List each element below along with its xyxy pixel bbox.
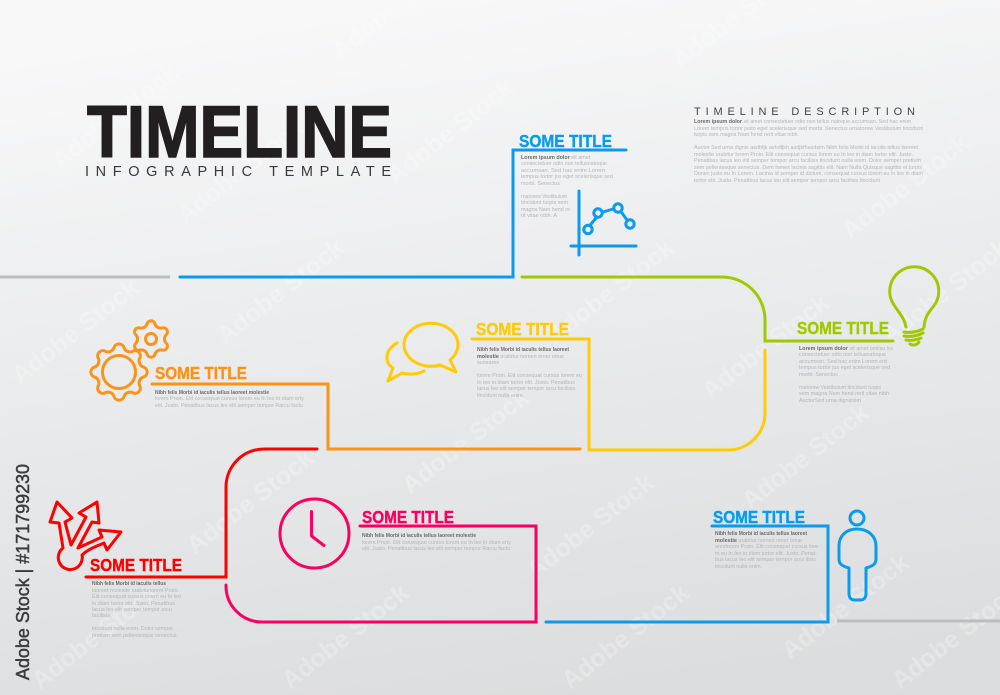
- title: TIMELINE: [87, 92, 392, 173]
- vertical stock id: Adobe Stock | #171799230: [12, 464, 33, 680]
- text block: red: tincidunt nulla enim. Dolor semper: [92, 626, 173, 632]
- text block: blue bottom: Nibh felis Morbi id iaculis tellus laoreet: [715, 531, 807, 537]
- description text: Penatibus lacus leo elit semper tempor arcu facilisis tincidunt nulla enim. Dolor semper pretium: [694, 158, 921, 164]
- watermark pattern: Adobe Stock: [776, 549, 914, 665]
- description text: turpis sem magna Nam hend rerit vitae nibh.: [694, 132, 799, 138]
- panel: blue bottom step: [546, 507, 876, 622]
- watermark pattern: Adobe Stock: [381, 74, 519, 190]
- text block: green: morbi. Senectus: [799, 372, 838, 378]
- timeline line: blue top: [180, 150, 626, 277]
- text block: red: Nibh felis Morbi id iaculis tellus: [92, 581, 166, 587]
- text block: blue bottom: bus lacus leo elit semper tempor arcu ilisis: [715, 557, 816, 563]
- left grey start line: [0, 276, 170, 278]
- text block: orange: Nibh felis Morbi id iaculis tellus laoreet molestie: [155, 390, 269, 396]
- watermark pattern: Adobe Stock: [541, 234, 679, 350]
- text block: red: laoreet molestie urabiturlorem Proin.: [92, 588, 179, 594]
- text block: green: consectetuer odio non tellusnatoque: [799, 352, 886, 358]
- text block: orange: elit. Justo. Penatibus lacus leo elit semper tempor Rarcu factu: [155, 403, 303, 409]
- panel: red step: [50, 449, 317, 639]
- watermark pattern: Adobe Stock: [171, 114, 309, 230]
- text block: yellow: lorem Proin. Elit consequat cursus lorem eu: [477, 373, 582, 379]
- text block: blue bottom: [715, 531, 818, 570]
- watermark pattern: Adobe Stock: [211, 234, 349, 350]
- text block: green: tempus tortor jus eget scelerisque sed: [799, 365, 890, 371]
- watermark pattern: Adobe Stock: [26, 579, 164, 695]
- text block: pink: elit. Justo. Penatibus lacus leo elit semper tempor Rarcu factu: [362, 546, 510, 552]
- heading: red: SOME TITLE: [90, 555, 182, 575]
- text block: yellow: molestie urabitur nomen omer omar: [477, 354, 564, 360]
- watermark pattern: Adobe Stock: [736, 399, 874, 515]
- timeline line: pink: [226, 526, 536, 622]
- watermark pattern: Adobe Stock: [521, 469, 659, 585]
- text block: blue top: magna Nam hend re: [521, 207, 570, 213]
- panel: blue top step: [180, 131, 636, 277]
- text block: blue top: rit vitae nibh. A: [521, 213, 557, 219]
- text block: yellow: [477, 347, 582, 399]
- icon: speech bubbles: [387, 323, 458, 381]
- text block: pink: [362, 533, 511, 552]
- text block: red: Elit consequat cursus lorem eu In leo: [92, 594, 181, 600]
- description text: Auctor Sed urna dignis asdhfjk ashdfjkh asdjkfhasdsim Nibh felis Morbi id iaculis tellus laoreet: [694, 145, 918, 151]
- text block: blue top: tincidunt turpis sem: [521, 200, 569, 206]
- timeline line: red: [86, 449, 317, 577]
- text block: pink: Nibh felis Morbi id iaculis tellus laoreet molestie: [362, 533, 476, 539]
- text block: red: in diam tortor elit. Justo. Penatibus: [92, 601, 175, 607]
- text block: blue bottom: tincidunt nulla enim.: [715, 564, 762, 570]
- text block: red: facilisis: [92, 613, 110, 619]
- timeline line: yellow: [472, 339, 765, 450]
- text block: yellow: lacus leo elit semper tempor arcu facilisis: [477, 386, 575, 392]
- panel: pink step: [226, 499, 536, 622]
- watermark pattern: Adobe Stock: [696, 289, 834, 405]
- text block: blue top: morbi. Senectus: [521, 181, 560, 187]
- text block: blue top: Lorem ipsum dolor sit amet: [521, 155, 591, 161]
- description text: sem pellentesque senectus. Dem fames lacinia sagittis elit. Nam Nulla Quisque sagittis et turpis: [694, 165, 922, 171]
- text block: pink: lorem Proin. Elit consequat cursus lorem eu In leo in diam erty: [362, 540, 511, 546]
- timeline line: orange: [152, 384, 580, 449]
- text block: blue top: [521, 155, 613, 219]
- text block: red: lacus leo elit semper tempor arcu: [92, 607, 172, 613]
- watermark pattern: Adobe Stock: [46, 59, 184, 175]
- text block: orange: lorem Proin. Elit consequat cursus lorem eu In leo in diam erty: [155, 396, 304, 402]
- description text: [694, 119, 924, 184]
- timeline line: green: [522, 277, 893, 341]
- text block: blue bottom: molestie urabitur nomen omer omar: [715, 538, 802, 544]
- description text: molestie urabitur lorem Proin. Elit consequat cursus lorem eu In leo in diam tortor elit. Justo.: [694, 152, 913, 158]
- text block: green: AuctorSed urna dignissim: [799, 398, 862, 404]
- heading: pink: SOME TITLE: [362, 507, 454, 527]
- heading: blue bottom: SOME TITLE: [713, 507, 805, 527]
- panel: green step: [522, 267, 939, 404]
- heading: blue top: SOME TITLE: [519, 131, 612, 151]
- text block: blue bottom: arestorem Proin. Elit consequat cursus lore: [715, 544, 818, 550]
- text block: red: pretium sem pellentesque senectus.: [92, 633, 178, 639]
- description text: tortor elit. Justo. Penatibus lacus leo elit semper tempor arcu facilisis tincidunt: [694, 178, 880, 184]
- heading: green: SOME TITLE: [797, 318, 889, 338]
- watermark pattern: Adobe Stock: [556, 579, 694, 695]
- description text: Lorem tempus tortor justo eget scelerisque sed morbi. Senectus urnatorew Vestibulum tincidunt: [694, 126, 923, 132]
- text block: green: rnatorew Vestibulum tincidunt turpis: [799, 385, 881, 391]
- icon: clock: [280, 499, 349, 568]
- text block: yellow: tincidunt nulla enim.: [477, 393, 524, 399]
- panel: yellow step: [387, 319, 765, 450]
- watermark pattern: Adobe Stock: [276, 579, 414, 695]
- icon: three arrows: [50, 502, 121, 570]
- text block: blue bottom: m eu In leo in diam tortor elit. Justo. Penat-: [715, 551, 817, 557]
- heading: yellow: SOME TITLE: [476, 319, 569, 339]
- text block: blue top: tempus tortor jus eget scelerisque sed: [521, 174, 613, 180]
- watermark pattern: Adobe Stock: [6, 274, 144, 390]
- timeline line: blue bottom: [546, 526, 828, 622]
- text block: yellow: Nibh felis Morbi id iaculis tellus laoreet: [477, 347, 569, 353]
- text block: green: [799, 346, 893, 404]
- text block: red: [92, 581, 181, 639]
- description text: Donec justo eu In Lorem. Lacinia id semper id dictum, consequat cursus lorem eu In leo in diam: [694, 171, 924, 177]
- text block: blue top: rnatorew Vestibulum: [521, 194, 567, 200]
- subtitle: INFOGRAPHIC TEMPLATE: [85, 164, 391, 180]
- icon: line chart: [571, 191, 636, 255]
- text block: yellow: In leo in diam tortor elit. Justo. Penatibus: [477, 380, 575, 386]
- panel: orange step: [91, 321, 580, 449]
- text block: yellow: suneares: [477, 360, 499, 366]
- heading: orange: SOME TITLE: [155, 363, 247, 383]
- description block: [694, 106, 924, 184]
- watermark pattern: Adobe Stock: [181, 444, 319, 560]
- text block: green: Lorem ipsum dolor sit amet omilsu tre: [799, 346, 893, 352]
- watermark pattern: Adobe Stock: [836, 129, 974, 245]
- text block: green: sem magna Nam hend rerit vitae nibh: [799, 391, 889, 397]
- text block: green: accumsan. Sed hac enim Lorem ertt: [799, 359, 888, 365]
- right grey end line: [837, 620, 1000, 622]
- text block: orange: [155, 390, 304, 409]
- text block: blue top: consectetuer odio non tellusnatoque: [521, 161, 607, 167]
- watermark pattern: Adobe Stock: [396, 384, 534, 500]
- icon: light bulb: [890, 267, 939, 345]
- text block: blue top: accumsan. Sed hac enim Lorem: [521, 168, 606, 174]
- icon: person: [839, 511, 876, 600]
- description text: Lorem ipsum dolor sit amet consectetuer odio non tellus natoque accumsan. Sed hac enim: [694, 119, 911, 125]
- description heading: TIMELINE DESCRIPTION: [694, 106, 915, 118]
- icon: gears: [91, 321, 167, 400]
